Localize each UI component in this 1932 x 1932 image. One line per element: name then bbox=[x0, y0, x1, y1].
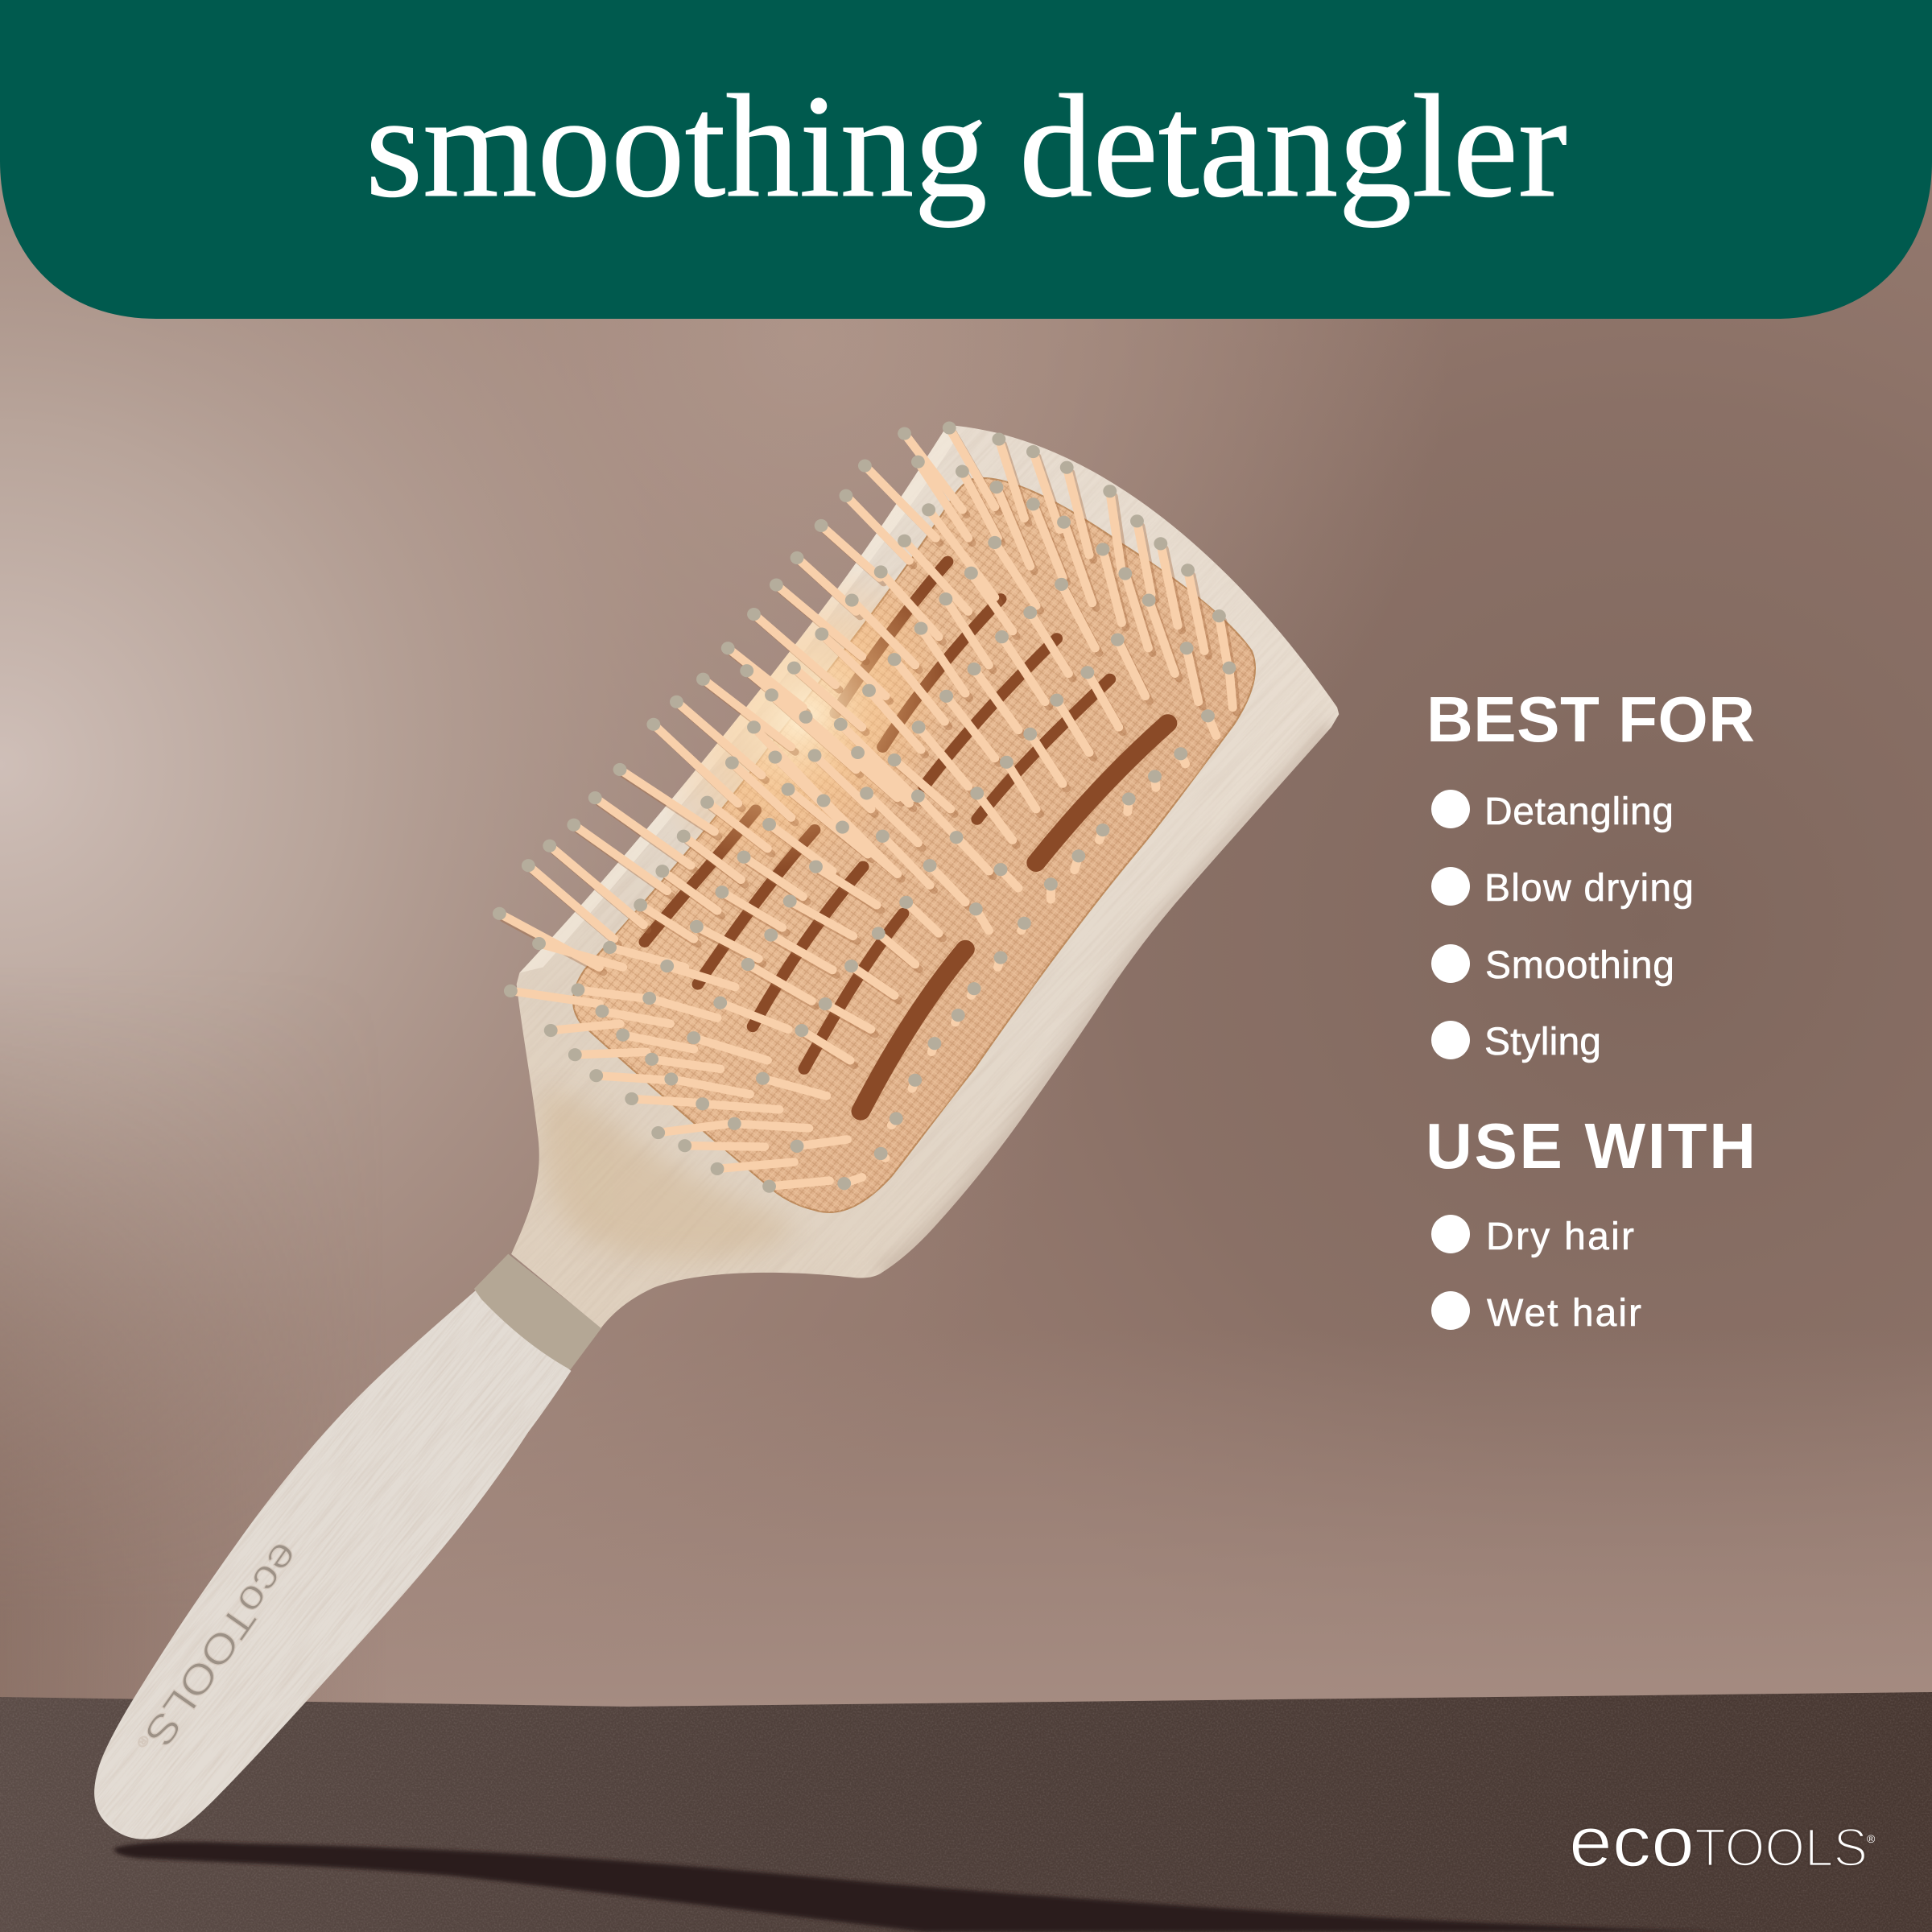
brush shadow on floor bbox=[114, 1842, 1731, 1932]
item: styling bbox=[1431, 1021, 1601, 1063]
item: detangling: Detangling bbox=[1484, 791, 1674, 833]
header banner bbox=[0, 0, 1932, 319]
background wall bbox=[0, 169, 1932, 1707]
brand logo bbox=[1569, 1802, 1876, 1881]
heading: best for: BEST FOR bbox=[1426, 683, 1755, 755]
dark floor surface bbox=[0, 1692, 1932, 1932]
light grain on paddle bbox=[533, 431, 1335, 1275]
pin shadows bbox=[504, 433, 1236, 1066]
brand logo: eco bbox=[1569, 1802, 1695, 1881]
brand logo: TOOLS bbox=[1695, 1818, 1868, 1878]
title: detangler bbox=[1019, 64, 1567, 228]
wooden paddle body bbox=[511, 425, 1339, 1328]
pin ball tips bbox=[499, 428, 1229, 1187]
handle logo imprint: ecoTOOLS ® bbox=[129, 1534, 309, 1765]
item: dry hair: Dry hair bbox=[1486, 1216, 1634, 1258]
item: wet hair: Wet hair bbox=[1487, 1292, 1641, 1335]
item: blow drying: Blow drying bbox=[1484, 867, 1694, 910]
list: best for bbox=[1431, 790, 1694, 1063]
item: smoothing: Smoothing bbox=[1485, 944, 1674, 987]
metal collar bbox=[474, 1254, 601, 1370]
brand logo: ® bbox=[1867, 1832, 1876, 1845]
brush illustration bbox=[94, 422, 1340, 1839]
bright edge and glow bbox=[519, 425, 960, 973]
bristle pad bbox=[573, 478, 1255, 1212]
pin shafts bbox=[499, 428, 1232, 1187]
title: smoothing bbox=[365, 64, 1024, 228]
brush handle bbox=[0, 1125, 668, 1932]
heading: use with: USE WITH bbox=[1426, 1110, 1756, 1182]
brush head bbox=[493, 422, 1340, 1328]
item: styling: Styling bbox=[1484, 1021, 1601, 1063]
pad slots bbox=[645, 562, 1168, 1111]
list: use with bbox=[1431, 1215, 1641, 1335]
